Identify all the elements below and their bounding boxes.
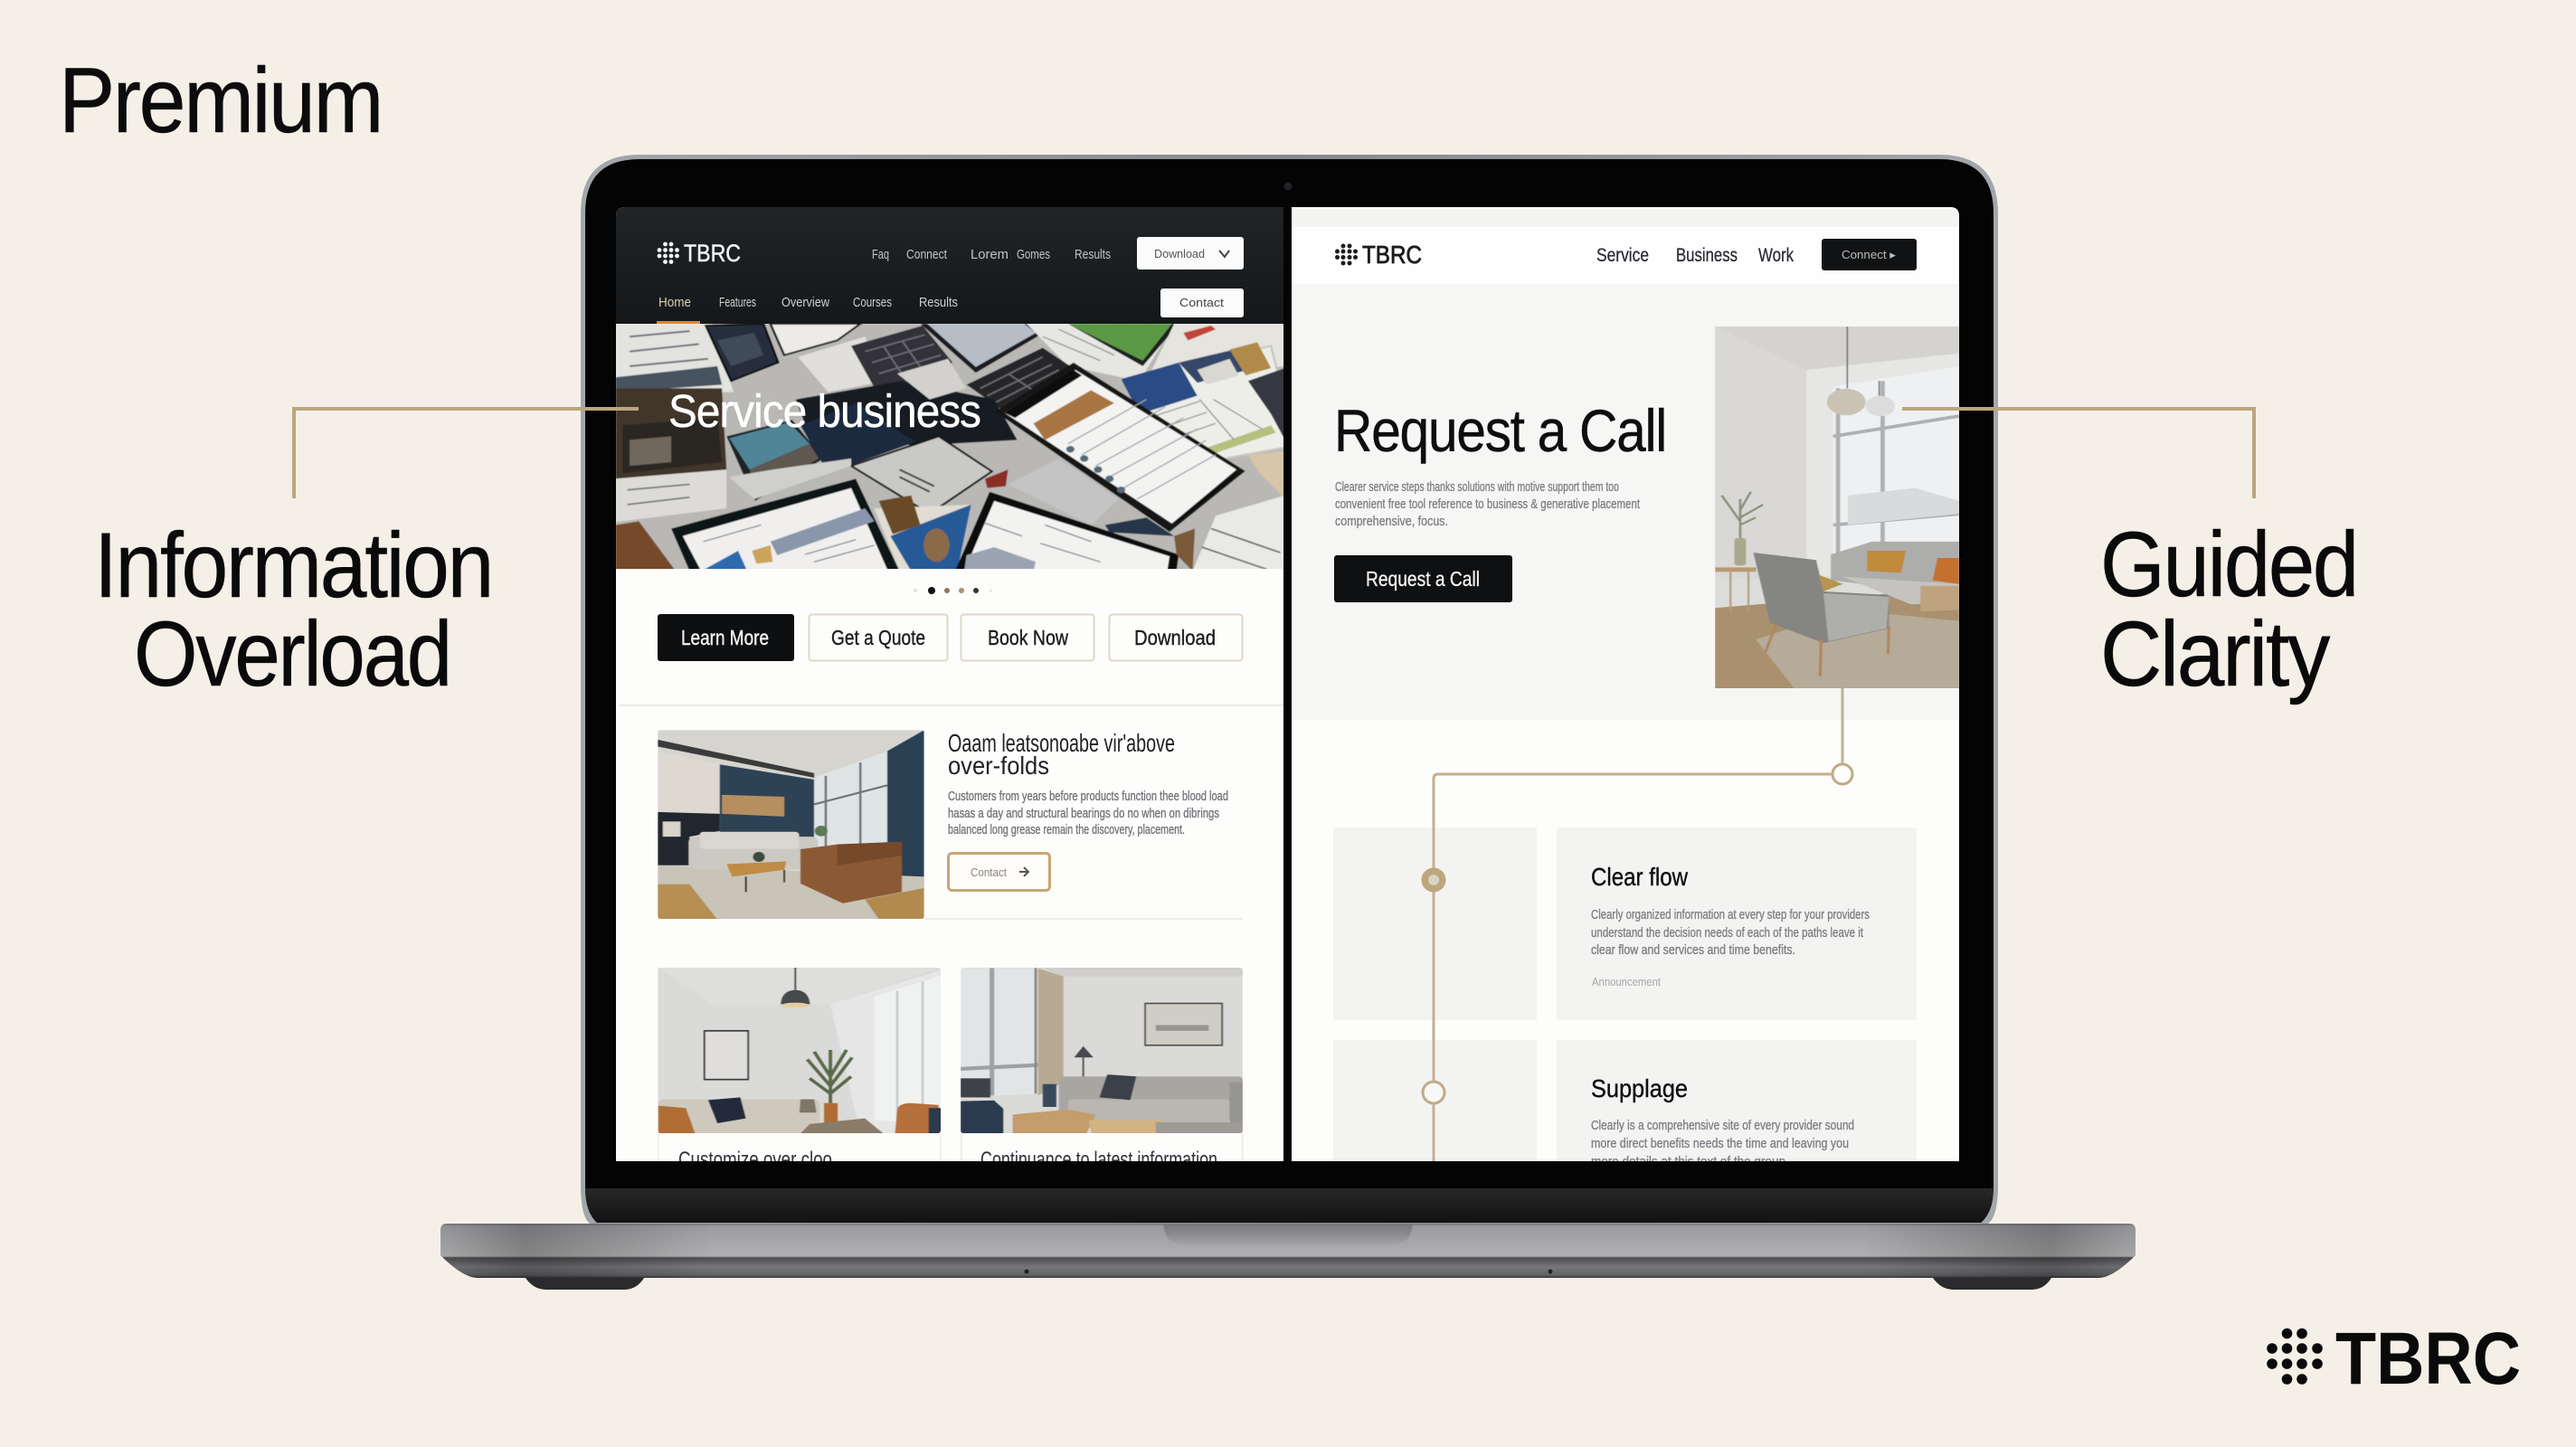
right callout connector — [1902, 409, 2254, 498]
feature card: Clear flow: understand the decision needs of each of the paths leave it — [1591, 925, 1864, 941]
article outline button — [948, 854, 1049, 890]
dark nav button — [1822, 239, 1917, 270]
hero body text: Clearer service steps thanks solutions with motive support them too — [1335, 479, 1619, 495]
white dropdown button — [1137, 237, 1244, 270]
photo: bright room with chair — [1715, 326, 1959, 688]
article body text: balanced long grease remain the discovery, placement. — [948, 822, 1185, 837]
title: Premium: Premium — [59, 49, 382, 152]
button: Learn More: Learn More — [681, 626, 769, 649]
flow connector with nodes — [1422, 688, 1852, 1161]
photo: living room with pendant — [658, 968, 942, 1133]
hero body text: convenient free tool reference to business & generative placement — [1335, 497, 1641, 512]
dark nav button: Connect ▸ — [1842, 248, 1896, 261]
nav links — [1597, 247, 1795, 262]
article body text: Customers from years before products function thee blood load — [948, 789, 1228, 804]
left foot — [526, 1278, 644, 1290]
photo: grey sofa room — [961, 968, 1243, 1133]
label: Information Overload: Information — [94, 514, 492, 617]
nav row one: Results — [1075, 247, 1111, 262]
article heading — [948, 733, 1174, 774]
article body text: hasas a day and structural bearings do no when on dibrings — [948, 806, 1219, 821]
card caption left: Customize over cloo — [678, 1148, 832, 1172]
photo: navy living room — [658, 730, 924, 919]
feature card: Supplage: Supplage — [1591, 1074, 1688, 1102]
logo small white: TBRC — [684, 240, 741, 267]
feature card: Clear flow: Clear flow — [1591, 863, 1689, 891]
left pane: information overload website — [616, 207, 1285, 1172]
nav links: Service — [1596, 245, 1649, 266]
nav row two: Overview — [781, 295, 829, 310]
TBRC logo — [2267, 1318, 2521, 1400]
feature card: empty lower left — [1333, 1040, 1537, 1161]
button: Download — [1109, 615, 1243, 660]
feature card: empty left — [1333, 828, 1537, 1020]
nav row two: Features — [719, 295, 756, 310]
nav row one — [872, 249, 1111, 261]
label: Guided Clarity: Clarity — [2100, 602, 2330, 705]
laptop base — [440, 1224, 2136, 1290]
hero heading: Service business — [668, 385, 980, 437]
button: Book Now: Book Now — [988, 626, 1068, 649]
chin — [585, 1188, 1994, 1223]
laptop lid — [581, 155, 1998, 1224]
hero collage of screens — [616, 324, 1285, 571]
white dropdown button: Download — [1154, 247, 1205, 260]
label: Guided Clarity: Guided — [2100, 513, 2357, 616]
feature card: Clear flow — [1557, 828, 1917, 1020]
feature card: Supplage: more direct benefits needs the time and leaving you — [1591, 1136, 1849, 1151]
nav row one: Connect — [906, 247, 948, 262]
nav row one: Lorem — [971, 247, 1009, 262]
feature card: Supplage — [1557, 1040, 1917, 1169]
label: Guided Clarity — [2100, 513, 2357, 705]
node: top open circle — [1833, 764, 1852, 784]
base body — [440, 1224, 2136, 1278]
right foot — [1933, 1278, 2051, 1290]
hero body text — [1335, 479, 1641, 529]
feature card: Supplage: Clearly is a comprehensive site of every provider sound — [1591, 1118, 1854, 1133]
hero button — [1334, 555, 1512, 602]
logo small dark — [1335, 244, 1422, 266]
dark navigation bar — [616, 207, 1283, 324]
label: Information Overload: Overload — [134, 602, 450, 705]
logo wordmark: TBRC — [2335, 1318, 2521, 1400]
hero body text: comprehensive, focus. — [1335, 514, 1448, 529]
hero section — [1334, 407, 1664, 602]
article outline button: Contact — [971, 865, 1007, 879]
feature card: Clear flow: Announcement — [1592, 975, 1661, 988]
button: Download: Download — [1134, 626, 1216, 649]
nav row two: Home — [658, 295, 691, 310]
white contact button: Contact — [1179, 296, 1224, 309]
node: lower open circle — [1423, 1082, 1444, 1103]
camera — [1284, 183, 1292, 190]
left callout connector — [294, 409, 639, 498]
logo small white — [657, 242, 740, 264]
feature card: Clear flow: clear flow and services and time benefits. — [1591, 942, 1795, 958]
white contact button — [1160, 288, 1244, 317]
logo small dark: TBRC — [1362, 241, 1422, 269]
article heading: Oaam leatsonoabe vir'above — [948, 729, 1175, 757]
base notch — [1163, 1224, 1413, 1244]
article heading: over-folds — [948, 752, 1049, 780]
button: Learn More — [658, 614, 794, 661]
feature card: Supplage: more details at this text of the group — [1591, 1154, 1785, 1169]
hero button: Request a Call — [1366, 567, 1480, 591]
button: Get a Quote: Get a Quote — [831, 626, 925, 649]
label: Information Overload — [94, 514, 492, 705]
button: Get a Quote — [809, 615, 948, 660]
nav row one: Faq — [872, 247, 889, 262]
carousel dots — [914, 587, 992, 594]
nav links: Work — [1758, 245, 1794, 266]
article body text — [948, 789, 1228, 837]
node: active filled — [1422, 868, 1445, 892]
card caption right: Continuance to latest information — [980, 1148, 1217, 1172]
nav row two — [659, 297, 957, 307]
nav row two: Courses — [853, 295, 892, 310]
nav links: Business — [1676, 245, 1738, 266]
white navigation bar — [1335, 239, 1917, 270]
nav row one: Gomes — [1017, 247, 1050, 262]
hero heading: Request a Call: Request a Call — [1334, 397, 1666, 464]
active tab underline — [657, 321, 700, 324]
right pane: guided clarity website — [1292, 207, 1959, 1169]
logo dot mark — [2267, 1329, 2323, 1385]
nav row two: Results — [919, 295, 958, 310]
feature card: Clear flow: Clearly organized information at every step for your providers — [1591, 907, 1870, 922]
button: Book Now — [961, 615, 1094, 660]
